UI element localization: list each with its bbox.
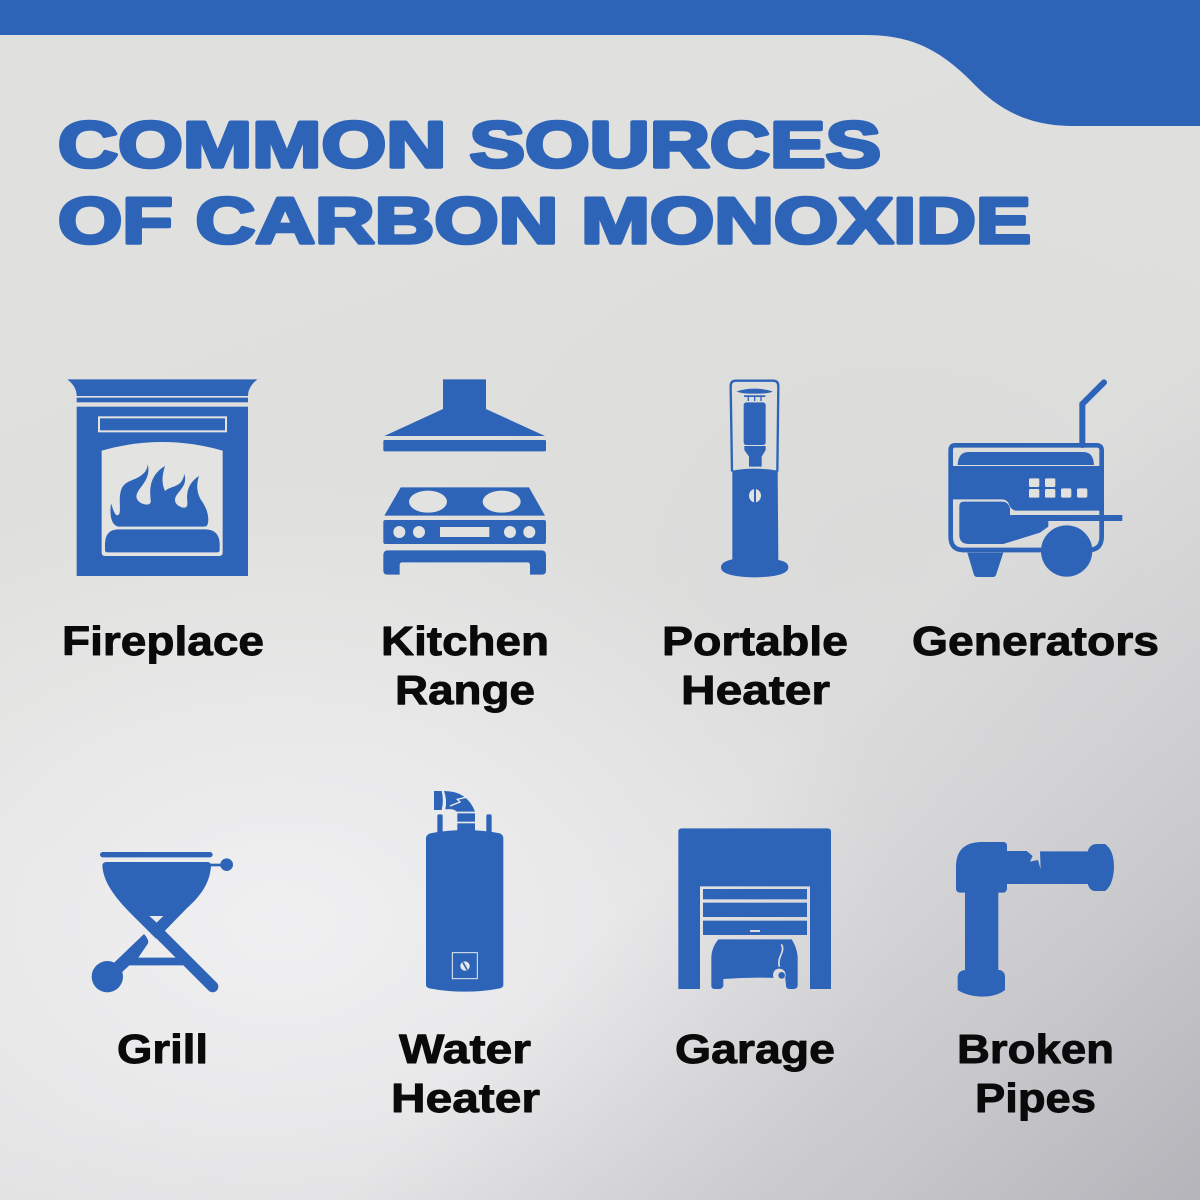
icon: portable heater bbox=[721, 381, 788, 577]
icon: generator bbox=[951, 382, 1122, 577]
icon: broken pipe bbox=[956, 842, 1114, 997]
icon: grill bbox=[92, 852, 233, 992]
title: OF CARBON MONOXIDE bbox=[58, 184, 1031, 257]
label: Broken Pipes: Broken bbox=[957, 1026, 1114, 1072]
label: Broken Pipes bbox=[957, 1026, 1114, 1121]
panel: grill bbox=[92, 852, 233, 1072]
label: Grill: Grill bbox=[117, 1026, 208, 1072]
label: Generators: Generators bbox=[912, 618, 1159, 664]
icon: fireplace bbox=[67, 379, 257, 576]
panel: water heater bbox=[391, 791, 540, 1121]
panel: broken pipes bbox=[956, 842, 1114, 1121]
label: Fireplace: Fireplace bbox=[62, 618, 264, 664]
label: Portable Heater: Heater bbox=[681, 667, 830, 713]
panel: fireplace bbox=[62, 379, 264, 664]
top blue banner with curved corner bbox=[0, 0, 1200, 126]
panel: garage bbox=[675, 828, 835, 1072]
icon: kitchen range bbox=[383, 379, 546, 575]
label: Broken Pipes: Pipes bbox=[975, 1075, 1096, 1121]
label: Water Heater: Heater bbox=[391, 1075, 540, 1121]
label: Garage: Garage bbox=[675, 1026, 835, 1072]
label: Portable Heater: Portable bbox=[662, 618, 848, 664]
label: Kitchen Range bbox=[381, 618, 549, 713]
title bbox=[58, 108, 1031, 257]
panel: portable heater bbox=[662, 381, 848, 713]
label: Kitchen Range: Kitchen bbox=[381, 618, 549, 664]
title: COMMON SOURCES bbox=[58, 108, 881, 181]
panel: kitchen range bbox=[381, 379, 549, 713]
icon: water heater bbox=[426, 791, 503, 992]
label: Kitchen Range: Range bbox=[395, 667, 535, 713]
label: Water Heater: Water bbox=[399, 1026, 531, 1072]
label: Water Heater bbox=[391, 1026, 540, 1121]
label: Portable Heater bbox=[662, 618, 848, 713]
panel: generators bbox=[912, 382, 1159, 664]
icon: garage bbox=[678, 828, 831, 989]
